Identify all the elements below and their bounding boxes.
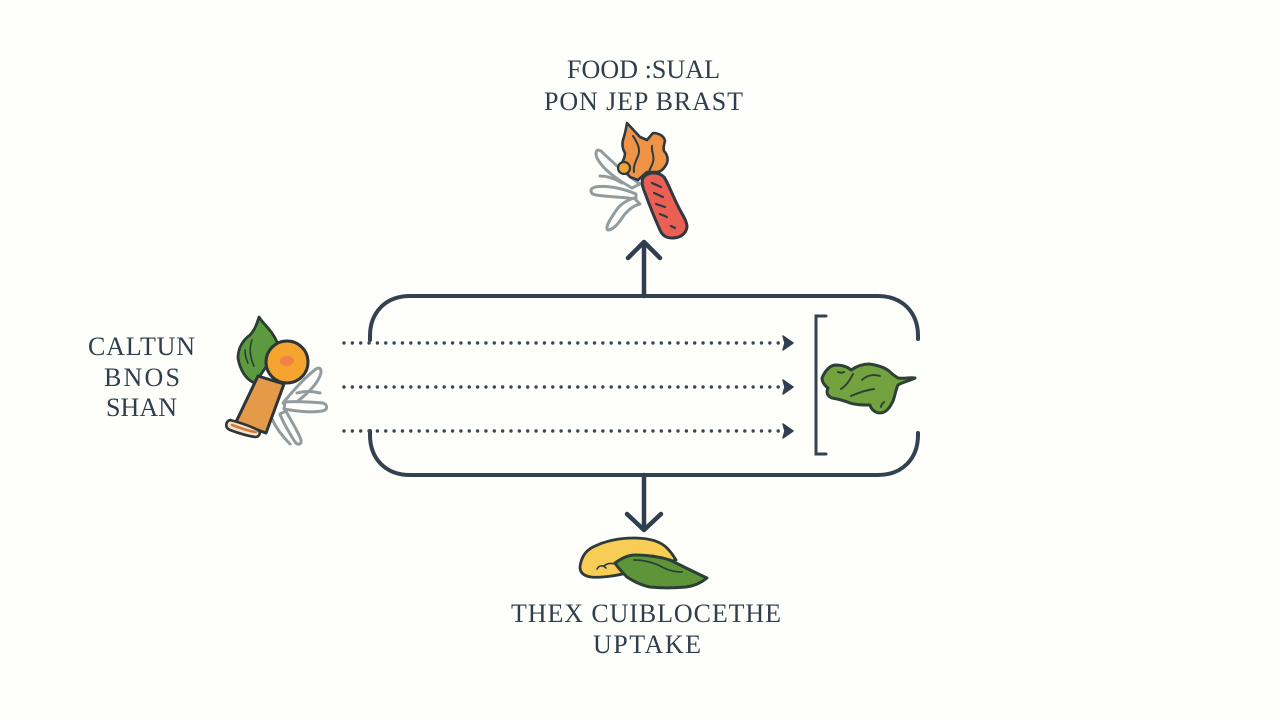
heading: top label: FOOD :SUAL xyxy=(567,55,720,84)
label: bottom output: UPTAKE xyxy=(593,630,701,659)
icon: leaf, root and herb xyxy=(226,317,327,444)
arrow: up out of the box xyxy=(628,242,660,296)
label: left input xyxy=(88,332,195,422)
icon: yellow pod and green leaf xyxy=(580,538,707,588)
heading: top label: PON JEP BRAST xyxy=(544,87,743,116)
panel: rounded container xyxy=(370,296,918,475)
label: left input: BNOS xyxy=(104,363,180,392)
heading: top label xyxy=(544,55,743,116)
bracket xyxy=(816,316,826,454)
arrows: three dotted flows xyxy=(344,336,793,438)
arrow: down out of the box xyxy=(627,475,661,530)
label: bottom output: THEX CUIBLOCETHE xyxy=(511,599,781,628)
label: bottom output xyxy=(511,599,781,659)
icon: herb, pepper and carrot xyxy=(591,123,687,238)
label: left input: CALTUN xyxy=(88,332,195,361)
icon: spinach leaf xyxy=(822,364,915,413)
label: left input: SHAN xyxy=(106,393,177,422)
